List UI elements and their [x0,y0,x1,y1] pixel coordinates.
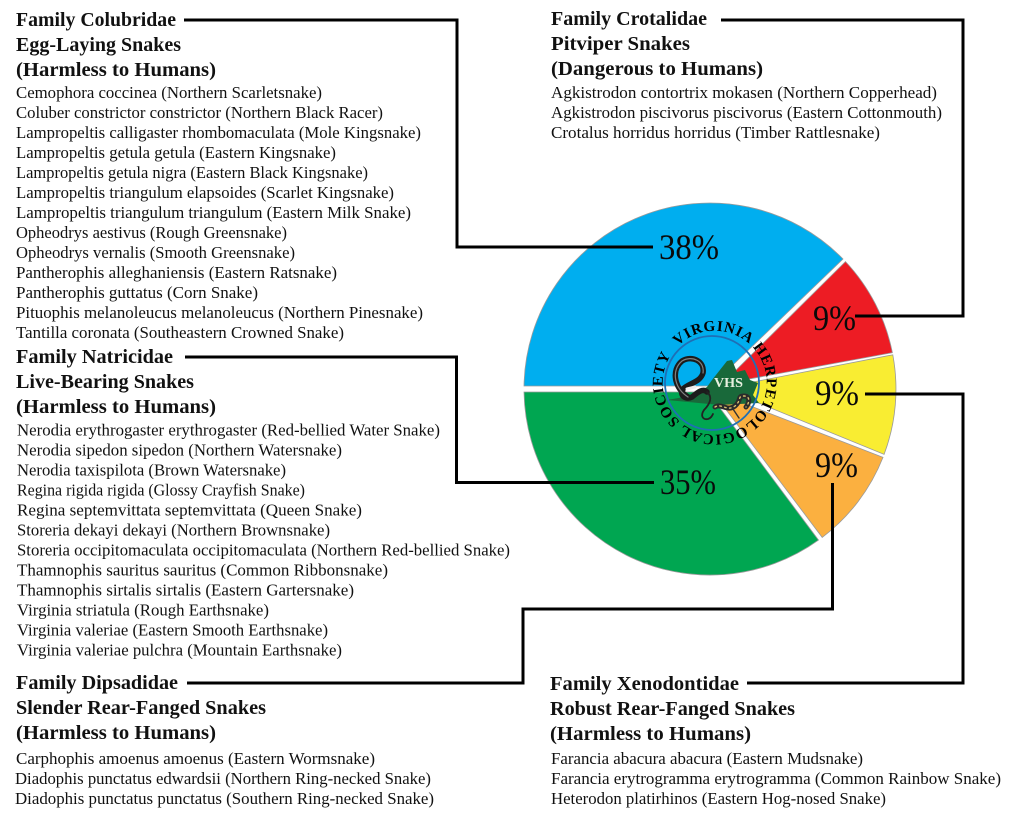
species list: Nerodia taxispilota (Brown Watersnake) [17,460,286,480]
icon: spotted salamander [715,396,749,418]
heading [551,8,763,80]
connector: Dipsadidae to 9% [187,483,832,683]
species list: Opheodrys aestivus (Rough Greensnake) [16,223,287,242]
label: red 9%: 9% [813,298,856,338]
VHS initials: VHS [714,376,743,391]
circular society name: VIRGINIA HERPETOLOGICAL SOCIETY [652,321,777,445]
species list: Nerodia sipedon sipedon (Northern Watersnake) [17,440,342,460]
heading: Family Xenodontidae [550,673,739,695]
species list: Diadophis punctatus edwardsii (Northern Ring-necked Snake) [15,769,431,788]
species list: Coluber constrictor constrictor (Northern Black Racer) [16,103,383,122]
species list: Storeria occipitomaculata occipitomaculata (Northern Red-bellied Snake) [17,540,510,560]
species list: Crotalus horridus horridus (Timber Rattlesnake) [551,123,880,142]
slice: Colubridae 38% [524,203,843,386]
panel: Family Xenodontidae [550,673,1001,808]
species list [16,83,423,342]
heading: Family Colubridae [16,9,176,31]
label: 38%: 38% [659,227,719,267]
logo: Virginia Herpetological Society [652,321,777,445]
slice: Crotalidae 9% [722,262,892,384]
species list: Farancia erytrogramma erytrogramma (Common Rainbow Snake) [551,769,1001,788]
heading [16,672,266,744]
species list: Lampropeltis triangulum triangulum (Eastern Milk Snake) [16,203,411,222]
species list: Pituophis melanoleucus melanoleucus (Northern Pinesnake) [16,303,423,322]
panel: Family Colubridae [16,9,423,342]
heading: Family Crotalidae [551,8,707,30]
heading: Egg-Laying Snakes [16,34,181,56]
heading: (Harmless to Humans) [550,723,751,745]
species list: Lampropeltis getula nigra (Eastern Black Kingsnake) [16,163,368,182]
heading: Pitviper Snakes [551,33,690,55]
connector: Colubridae to 38% [184,20,653,247]
species list: Lampropeltis triangulum elapsoides (Scarlet Kingsnake) [16,183,394,202]
label: yellow 9%: 9% [815,373,859,413]
species list: Diadophis punctatus punctatus (Southern Ring-necked Snake) [15,789,434,808]
pie chart [524,203,896,575]
heading [16,346,216,418]
species list: Lampropeltis calligaster rhombomaculata (Mole Kingsnake) [16,123,421,142]
heading: (Dangerous to Humans) [551,58,763,80]
species list: Agkistrodon contortrix mokasen (Northern Copperhead) [551,83,937,102]
species list: Regina septemvittata septemvittata (Queen Snake) [17,500,362,520]
species list: Lampropeltis getula getula (Eastern Kingsnake) [16,143,336,162]
species list: Nerodia erythrogaster erythrogaster (Red-bellied Water Snake) [17,420,440,440]
heading: Family Dipsadidae [16,672,178,694]
species list: Cemophora coccinea (Northern Scarletsnake) [16,83,322,102]
species list: Pantherophis alleghaniensis (Eastern Ratsnake) [16,263,337,282]
panel: Family Dipsadidae [15,672,434,808]
species list: Storeria dekayi dekayi (Northern Brownsnake) [17,520,330,540]
species list [551,749,1001,808]
logo ring [665,336,759,430]
species list: Tantilla coronata (Southeastern Crowned Snake) [16,323,344,342]
species list: Virginia valeriae (Eastern Smooth Earthsnake) [17,620,328,640]
species list [15,749,434,808]
slice: Xenodontidae 9% [722,355,896,454]
species list: Virginia valeriae pulchra (Mountain Earthsnake) [17,640,342,660]
species list: Regina rigida rigida (Glossy Crayfish Snake) [17,480,305,500]
species list: Farancia abacura abacura (Eastern Mudsnake) [551,749,863,768]
species list: Heterodon platirhinos (Eastern Hog-nosed Snake) [551,789,886,808]
species list: Carphophis amoenus amoenus (Eastern Wormsnake) [16,749,375,768]
heading: Live-Bearing Snakes [16,371,194,393]
label: 35%: 35% [660,462,716,502]
species list [17,420,510,660]
panel: Family Natricidae [16,346,510,660]
species list [551,83,942,142]
slice: Dipsadidae 9% [712,391,883,537]
heading: Family Natricidae [16,346,173,368]
species list: Agkistrodon piscivorus piscivorus (Eastern Cottonmouth) [551,103,942,122]
icon: coiled black snake [675,359,713,419]
heading: (Harmless to Humans) [16,59,216,81]
heading: Robust Rear-Fanged Snakes [550,698,795,720]
species list: Opheodrys vernalis (Smooth Greensnake) [16,243,295,262]
heading [550,673,795,745]
connector: Xenodontidae to 9% [747,394,963,683]
heading: Slender Rear-Fanged Snakes [16,697,266,719]
heading [16,9,216,81]
slice: Natricidae 35% [524,392,818,575]
species list: Thamnophis sirtalis sirtalis (Eastern Gartersnake) [17,580,354,600]
species list: Pantherophis guttatus (Corn Snake) [16,283,258,302]
connector: Crotalidae to 9% [721,20,963,316]
panel: Family Crotalidae [551,8,942,142]
connector: Natricidae to 35% [185,357,654,482]
label: orange 9%: 9% [815,445,858,485]
species list: Virginia striatula (Rough Earthsnake) [17,600,269,620]
heading: (Harmless to Humans) [16,722,216,744]
species list: Thamnophis sauritus sauritus (Common Ribbonsnake) [17,560,388,580]
heading: (Harmless to Humans) [16,396,216,418]
icon: Virginia state shape [667,360,759,405]
